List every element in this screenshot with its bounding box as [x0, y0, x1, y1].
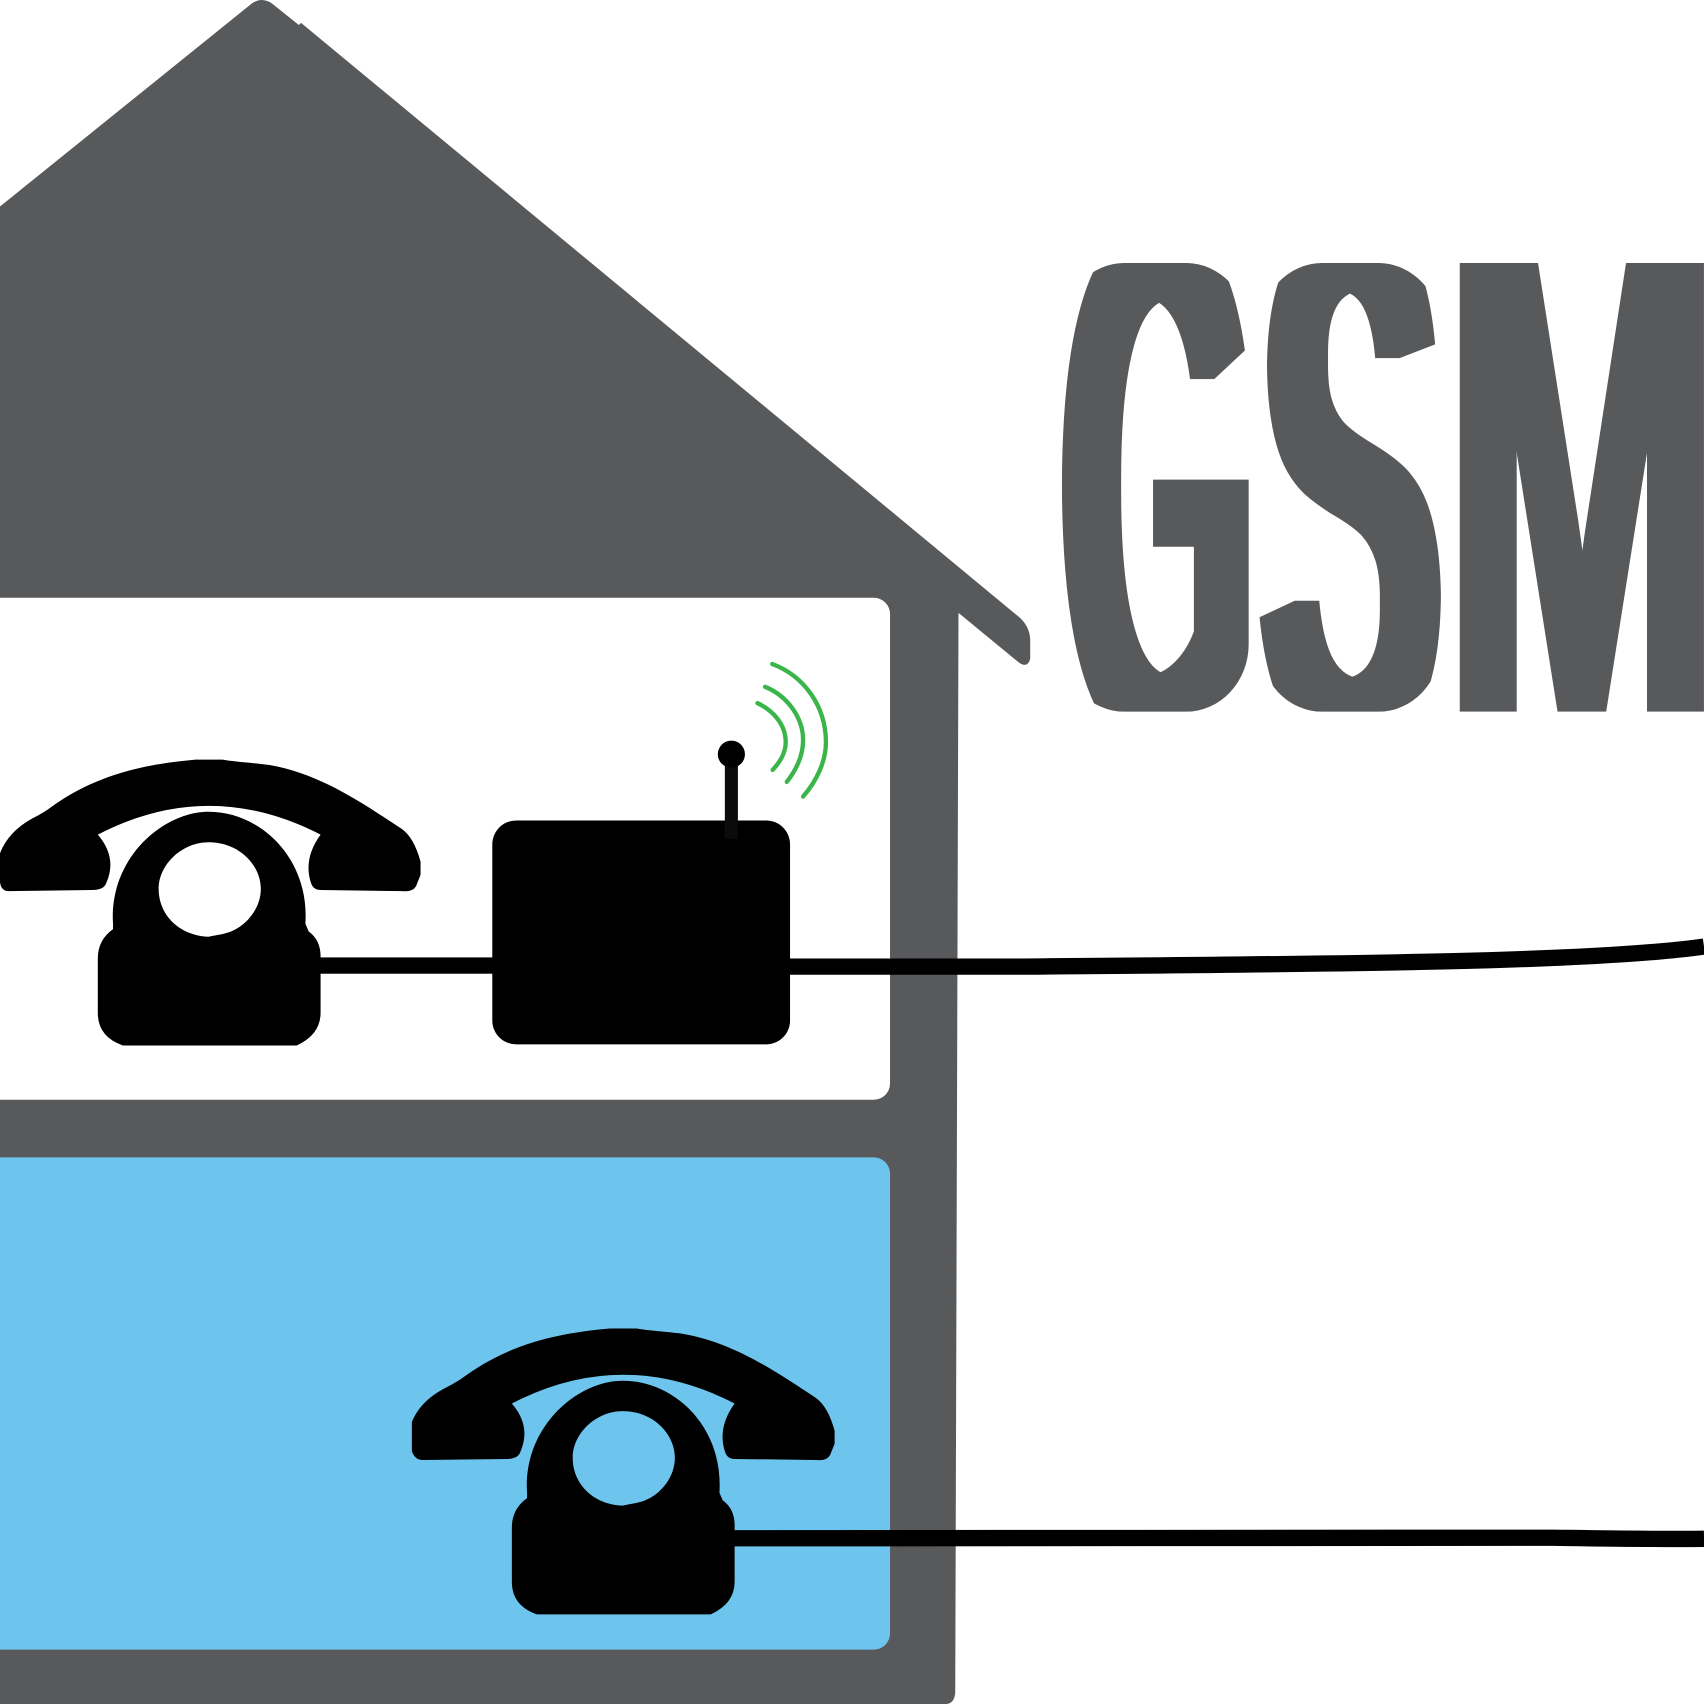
icon: lower telephone — [412, 1329, 835, 1614]
line: router to outside — [782, 947, 1704, 967]
house silhouette — [0, 0, 1030, 1704]
icon: wireless signal waves — [757, 664, 826, 797]
line: phone to router — [315, 957, 500, 974]
title: GSM: S — [1263, 67, 1439, 906]
icon: router — [492, 820, 790, 1044]
title: GSM — [1062, 263, 1704, 712]
line: lower phone to outside — [728, 1538, 1704, 1539]
panel: upper room — [0, 598, 890, 1100]
title: GSM: G — [1064, 66, 1253, 906]
icon: upper telephone — [0, 760, 421, 1045]
icon: router antenna — [718, 741, 745, 839]
panel: lower room — [0, 1157, 890, 1650]
